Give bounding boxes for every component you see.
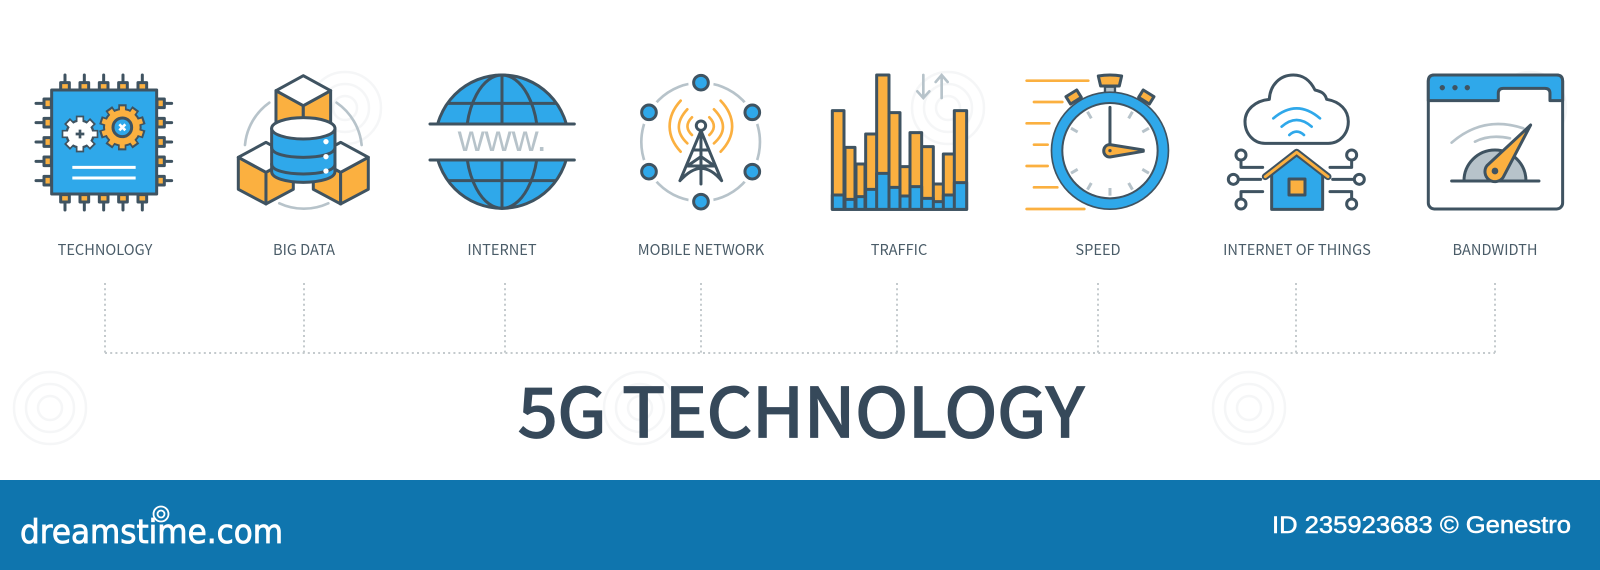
- globe bottom half: [436, 162, 568, 210]
- antenna tower: [680, 121, 722, 184]
- gauge dial: [1452, 150, 1539, 181]
- orange gear: [94, 99, 151, 155]
- browser header: [1428, 75, 1563, 101]
- left cube: [238, 142, 293, 204]
- icon: big data: [238, 76, 368, 209]
- label: technology: TECHNOLOGY: [58, 239, 153, 260]
- dotted connector: [105, 283, 1495, 353]
- signal waves: [670, 101, 732, 152]
- right cube: [313, 142, 368, 204]
- label: internet of things: INTERNET OF THINGS: [1223, 239, 1371, 260]
- footer logo text: dreamstime.com: [20, 512, 283, 551]
- label: mobile network: MOBILE NETWORK: [638, 239, 765, 260]
- image id and credit: ID 235923683 © Genestro: [1272, 512, 1571, 539]
- label: big data: BIG DATA: [273, 239, 335, 260]
- www text: www.: [457, 117, 547, 159]
- orange bars: [832, 75, 967, 209]
- label: traffic: TRAFFIC: [871, 239, 927, 260]
- label: bandwidth: BANDWIDTH: [1452, 239, 1538, 260]
- band lines: [430, 124, 574, 160]
- footer bar: [0, 480, 1600, 570]
- circuit connectors: [1228, 150, 1364, 209]
- icon: internet of things: [1228, 75, 1364, 209]
- crown and buttons: [1066, 75, 1154, 104]
- speed lines: [1027, 81, 1088, 209]
- top cube: [276, 76, 331, 127]
- gauge arcs: [1452, 124, 1523, 143]
- transfer arrows: [917, 75, 948, 98]
- orbit arcs: [245, 103, 362, 209]
- blue bars: [832, 173, 967, 209]
- network nodes: [636, 70, 765, 214]
- clock hands: [1104, 107, 1143, 157]
- icon: speed stopwatch: [1027, 75, 1169, 210]
- wifi arcs: [1273, 108, 1320, 135]
- dashed ring: [641, 83, 760, 201]
- database cylinder: [272, 118, 335, 182]
- window dots: [1440, 85, 1470, 90]
- title: 5G TECHNOLOGY: [518, 358, 1085, 457]
- icon: internet globe: [430, 75, 574, 208]
- icon: mobile network: [636, 70, 765, 214]
- watch ring: [1051, 91, 1169, 210]
- house: [1265, 152, 1328, 209]
- browser window: [1428, 75, 1563, 209]
- chip pins: [36, 75, 172, 210]
- icon: technology chip: [36, 75, 172, 210]
- ticks: [1071, 112, 1149, 196]
- footer logo spiral: [154, 506, 168, 522]
- text lines: [72, 167, 136, 178]
- chip body: [52, 90, 157, 194]
- cloud: [1245, 75, 1348, 143]
- labels: [58, 239, 1538, 260]
- icon: traffic chart: [832, 75, 967, 209]
- needle: [1485, 125, 1531, 182]
- globe top half: [436, 74, 568, 122]
- white gear: [62, 116, 98, 152]
- label: speed: SPEED: [1075, 239, 1121, 260]
- label: internet: INTERNET: [467, 239, 537, 260]
- icon: bandwidth browser: [1428, 75, 1563, 209]
